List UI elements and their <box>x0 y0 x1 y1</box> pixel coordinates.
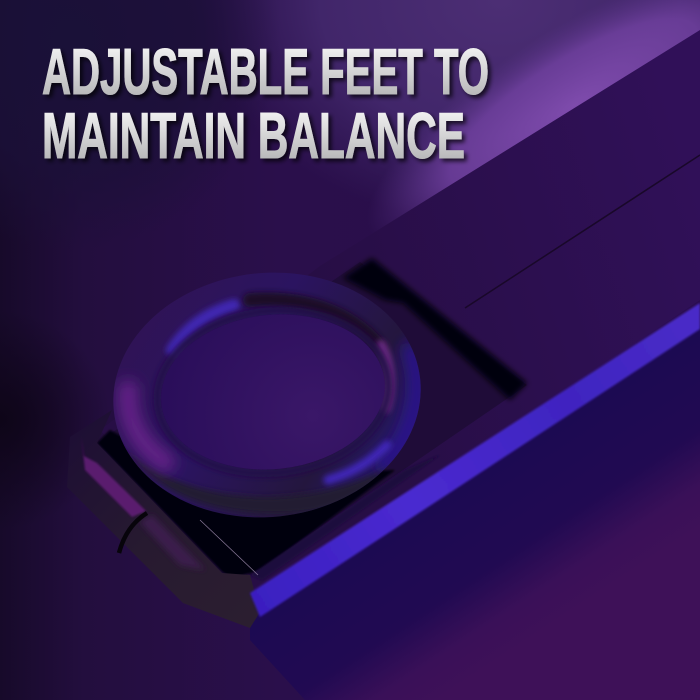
magenta highlight right <box>381 345 390 408</box>
recess floor <box>97 262 527 575</box>
foot outer ring <box>101 258 433 532</box>
blue highlight upper left <box>172 305 234 350</box>
foot frame bezel <box>67 410 260 628</box>
title line 2: MAINTAIN BALANCE <box>42 99 465 172</box>
recess floor band near strip <box>250 455 440 580</box>
magenta highlight left <box>128 390 165 462</box>
shadow ring around pad <box>154 306 394 478</box>
recess dark slot: upper <box>343 258 527 400</box>
blue highlight lower right <box>328 445 387 480</box>
arm seam line <box>465 155 700 308</box>
desk leg arm: top face <box>100 30 700 590</box>
lit blue edge strip <box>250 303 700 617</box>
dark upper inner rim <box>250 299 378 345</box>
recess dark slot: lower <box>97 430 395 576</box>
foot inner pad <box>154 304 392 480</box>
title <box>42 35 489 172</box>
foot dark lower rim <box>129 454 388 514</box>
blue outer rim right <box>385 350 417 465</box>
arm: side face <box>250 325 700 700</box>
rubber foot <box>113 272 421 518</box>
